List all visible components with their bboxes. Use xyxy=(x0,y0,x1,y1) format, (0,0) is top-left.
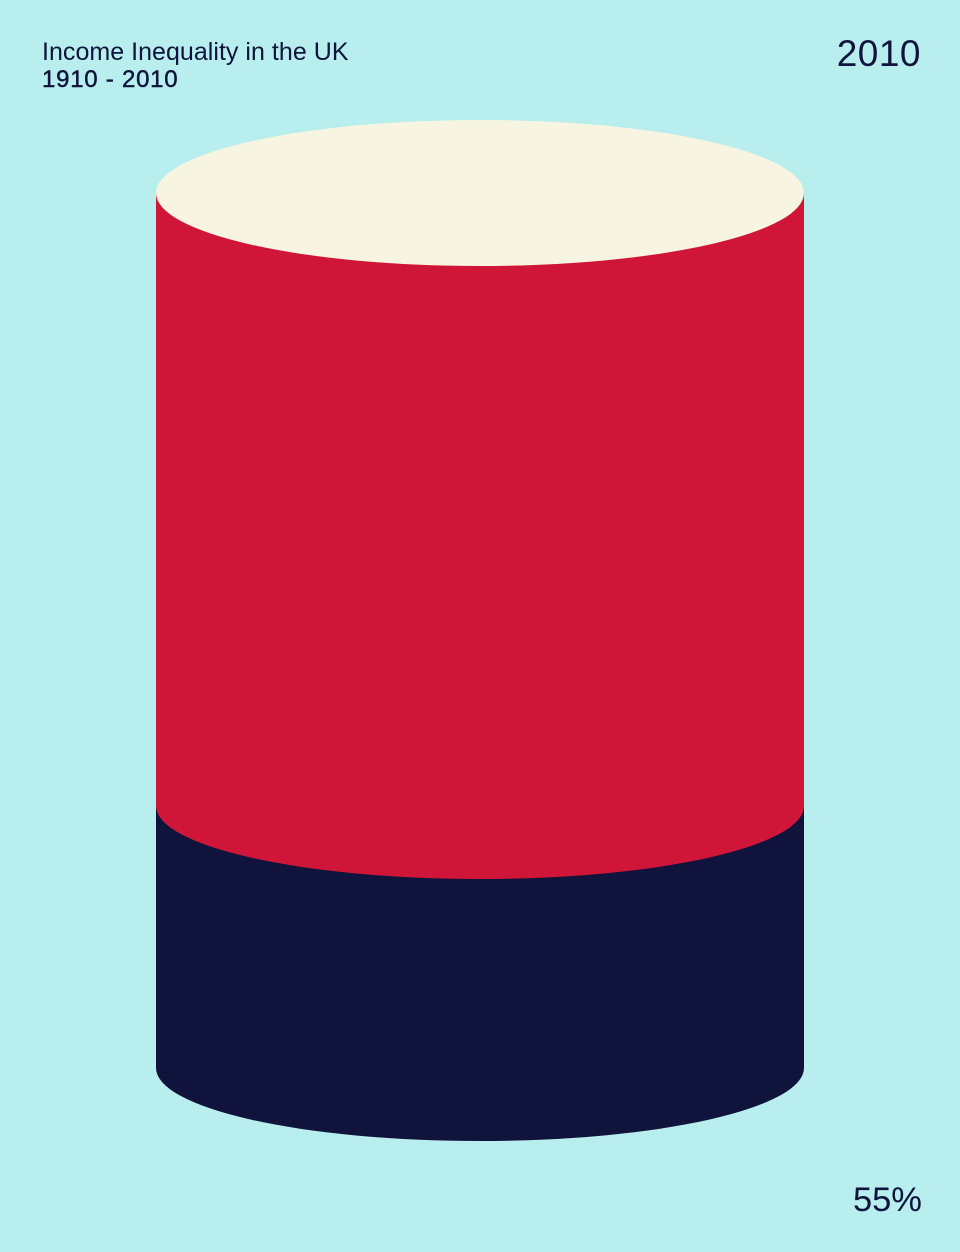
cream cylinder top xyxy=(156,120,804,266)
percentage label: 55% xyxy=(853,1181,922,1219)
year label: 2010 xyxy=(837,33,921,74)
subtitle: 1910 - 2010 xyxy=(42,66,178,93)
red upper segment xyxy=(156,192,804,879)
navy lower segment xyxy=(156,800,804,1141)
title: Income Inequality in the UK xyxy=(42,38,349,66)
